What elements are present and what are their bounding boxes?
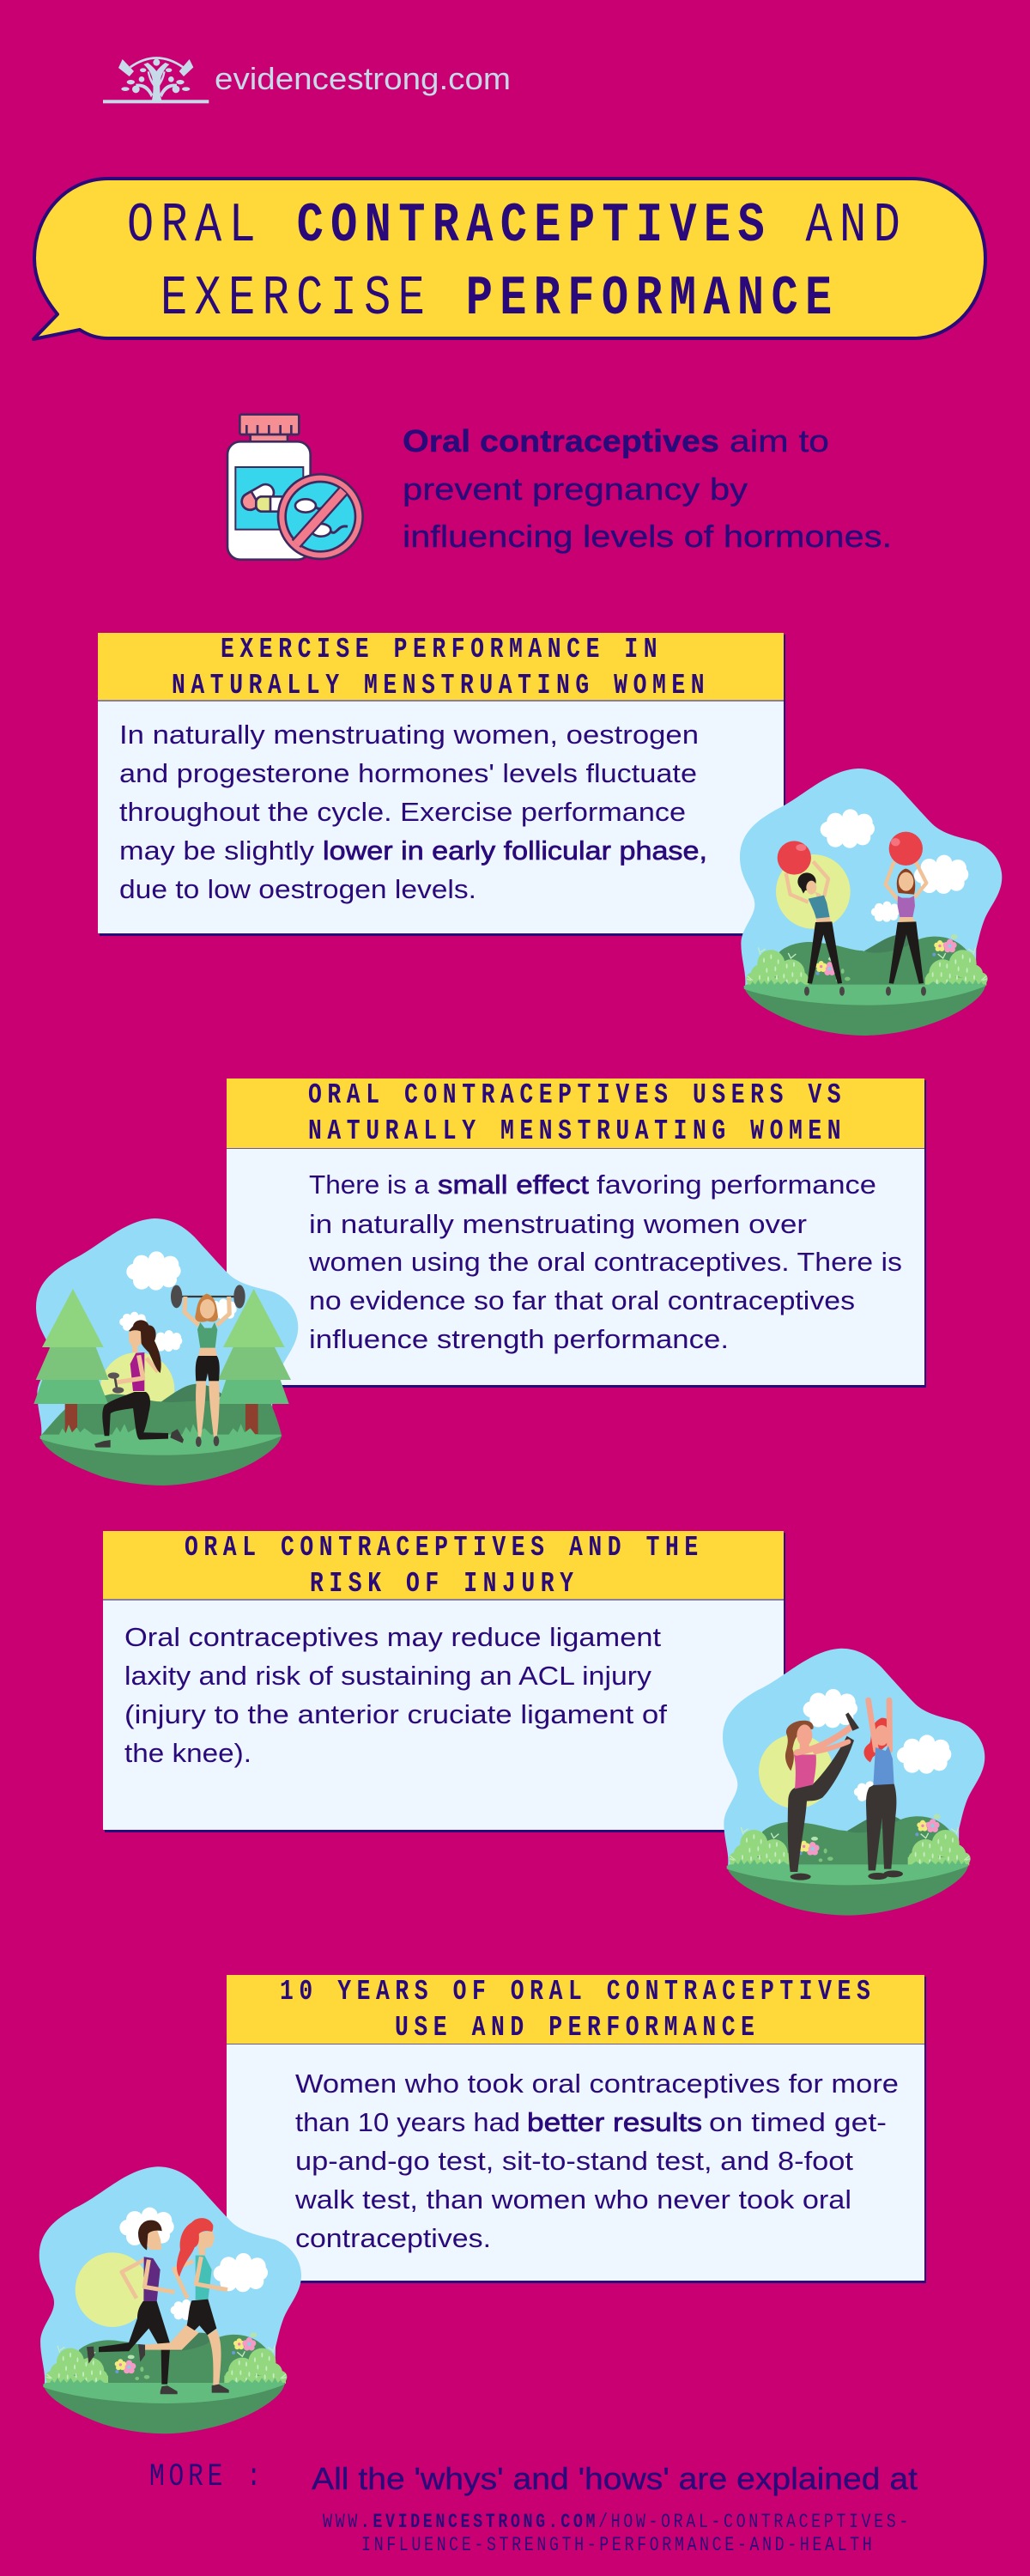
- body text: up-and-go test, sit-to-stand test, and 8-foot: [295, 2146, 853, 2176]
- heading: [172, 633, 710, 702]
- intro text: prevent pregnancy by: [403, 471, 748, 507]
- intro text: Oral contraceptives: [403, 423, 719, 459]
- logo text: evidencestrong.com: [215, 61, 511, 96]
- body text: the knee).: [124, 1738, 251, 1768]
- more label: MORE :: [149, 2459, 265, 2495]
- heading: [185, 1531, 704, 1600]
- explanation line: All the 'whys' and 'hows' are explained at: [312, 2461, 918, 2496]
- body text: Women who took oral contraceptives for more: [295, 2069, 899, 2099]
- intro text: influencing levels of hormones.: [403, 519, 892, 554]
- heading: NATURALLY MENSTRUATING WOMEN: [308, 1115, 846, 1147]
- figure: standing woman with barbell: [171, 1285, 245, 1447]
- body text: no evidence so far that oral contraceptives: [309, 1285, 855, 1315]
- body text: women using the oral contraceptives. There is: [308, 1247, 902, 1277]
- body text: favoring performance: [597, 1170, 876, 1200]
- panel 3: risk of injury: [103, 1531, 785, 1832]
- body text: in naturally menstruating women over: [309, 1209, 807, 1239]
- illustration: women lifting weights among trees: [33, 1218, 298, 1485]
- figure: woman with ball, right: [886, 832, 926, 996]
- illustration: two women lifting exercise balls: [740, 769, 1002, 1036]
- figure: woman stretching leg: [785, 1712, 859, 1880]
- body text: There is a: [309, 1170, 430, 1200]
- figure: dark-haired runner: [87, 2221, 178, 2394]
- panel 1: naturally menstruating women: [98, 633, 785, 936]
- heading: [308, 1078, 846, 1147]
- panel 4: ten years of use: [227, 1975, 926, 2283]
- intro text: [403, 423, 892, 554]
- heading: 10 YEARS OF ORAL CONTRACEPTIVES: [280, 1975, 876, 2008]
- intro section: [227, 415, 892, 560]
- footer: more information: [149, 2459, 918, 2557]
- panel box: [227, 1078, 926, 1388]
- url: INFLUENCE-STRENGTH-PERFORMANCE-AND-HEALTH: [361, 2535, 875, 2557]
- title speech bubble: [33, 179, 985, 339]
- body text: laxity and risk of sustaining an ACL injury: [124, 1661, 652, 1691]
- body text: lower in early follicular phase,: [323, 835, 707, 866]
- body text: (injury to the anterior cruciate ligament of: [124, 1699, 667, 1729]
- body text: throughout the cycle. Exercise performance: [119, 797, 686, 827]
- figure: kneeling woman with dumbbell: [94, 1320, 184, 1448]
- body text: may be slightly: [119, 835, 315, 866]
- tree: right: [218, 1289, 291, 1434]
- body text: and progesterone hormones' levels fluctuate: [119, 758, 697, 788]
- body text: due to low oestrogen levels.: [119, 874, 476, 904]
- figure: woman with ball, left: [778, 841, 845, 996]
- body text: small effect: [438, 1170, 589, 1200]
- heading: ORAL CONTRACEPTIVES AND THE: [185, 1531, 704, 1564]
- panel box: [103, 1531, 785, 1832]
- figure: red-haired runner: [138, 2218, 229, 2393]
- panel 2: users vs naturally menstruating: [227, 1078, 926, 1388]
- body text: Oral contraceptives may reduce ligament: [124, 1622, 661, 1652]
- icon: pill bottle with no-sperm sign: [227, 415, 363, 560]
- figure: woman with raised arms: [863, 1700, 903, 1880]
- heading: USE AND PERFORMANCE: [395, 2011, 760, 2044]
- url: [323, 2512, 912, 2557]
- body text: influence strength performance.: [309, 1324, 729, 1354]
- body text: [294, 2069, 899, 2253]
- heading: [280, 1975, 876, 2044]
- panel box: [98, 633, 785, 936]
- illustration: two women stretching: [723, 1649, 985, 1916]
- heading: RISK OF INJURY: [310, 1567, 579, 1600]
- heading: EXERCISE PERFORMANCE IN: [221, 633, 663, 665]
- body text: than 10 years had: [295, 2107, 520, 2137]
- title text: ORAL CONTRACEPTIVES AND: [127, 194, 907, 258]
- icon: tree and barbell logo: [103, 58, 209, 103]
- body text: [119, 720, 707, 904]
- panel box: [227, 1975, 926, 2283]
- intro text: aim to: [730, 423, 829, 459]
- bubble shape: [33, 179, 985, 339]
- body text: walk test, than women who never took oral: [294, 2184, 851, 2215]
- body text: [308, 1170, 902, 1354]
- body text: [124, 1622, 667, 1768]
- body text: contraceptives.: [295, 2223, 491, 2253]
- body text: In naturally menstruating women, oestrogen: [119, 720, 699, 750]
- logo: evidencestrong.com: [103, 58, 511, 103]
- heading: NATURALLY MENSTRUATING WOMEN: [172, 669, 710, 702]
- title text: [127, 194, 907, 331]
- heading: ORAL CONTRACEPTIVES USERS VS: [308, 1078, 846, 1111]
- illustration: two women running: [39, 2166, 301, 2433]
- title text: EXERCISE PERFORMANCE: [161, 267, 839, 331]
- body text: better results: [527, 2107, 702, 2137]
- body text: on timed get-: [709, 2107, 887, 2137]
- url: WWW.EVIDENCESTRONG.COM/HOW-ORAL-CONTRACEPTIVES-: [323, 2512, 912, 2534]
- tree: left: [33, 1289, 109, 1434]
